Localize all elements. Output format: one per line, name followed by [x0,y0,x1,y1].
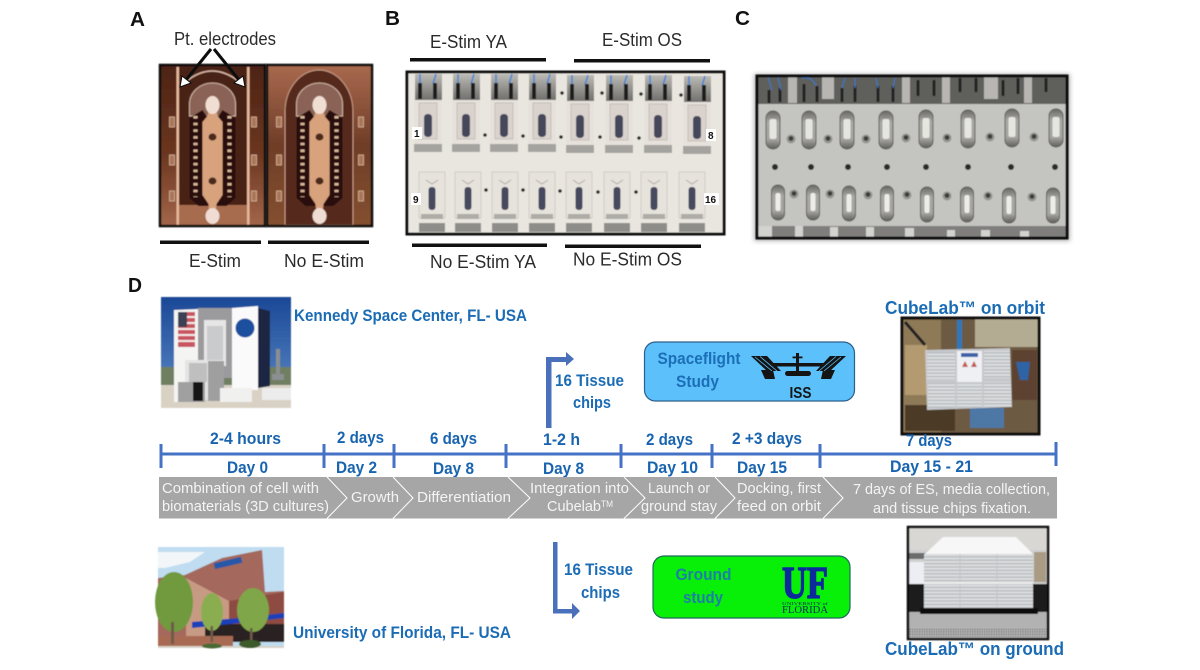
step: integration: Cubelab [547,498,601,515]
step: differentiation: Differentiation [417,489,511,506]
arrow: up to spaceflight study [546,352,574,428]
arrow: down to ground study [553,542,580,619]
step: integration [530,480,629,515]
timeline duration labels: 2-4 hours [210,430,281,448]
panel B: chip array photograph [385,8,724,272]
label: 16 tissue chips, ground [564,560,633,602]
logo: University of Florida [782,557,829,616]
step: seven days [853,481,1050,517]
step: growth: Growth [351,489,399,506]
timeline day labels: Day 2 [336,459,377,477]
timeline duration labels: 2 days [646,431,693,449]
timeline day labels: Day 15 - 21 [890,458,973,476]
box: spaceflight study [644,342,854,402]
photo: CubeLab on ground [908,527,1048,639]
label: University of Florida: University of Florida, FL- USA [293,623,511,642]
label: No E-Stim OS: No E-Stim OS [573,250,682,270]
label: E-Stim: E-Stim [189,251,241,271]
photo: Kennedy Space Center building [161,297,291,408]
step: launch [641,480,717,515]
label: 16 tissue chips, spaceflight: chips [573,393,611,412]
box: spaceflight study: Spaceflight [658,349,741,368]
photo: CubeLab on orbit [902,318,1039,434]
chip number 1: 1 [414,129,420,140]
timeline day labels: Day 8 [543,460,584,478]
logo: University of Florida: UNIVERSITY of [782,601,829,606]
label: E-Stim YA: E-Stim YA [430,32,507,52]
chip number 9 [411,193,421,206]
logo: University of Florida: FLORIDA [782,605,829,616]
chip number 9: 9 [413,195,419,206]
chip number 8 [706,129,716,142]
box: ground study [653,556,850,618]
label: CubeLab on orbit: CubeLab™ on orbit [885,298,1045,318]
step: seven days: and tissue chips fixation. [873,500,1031,517]
panel letter B: B [385,8,400,30]
icon: International Space Station [751,353,846,379]
photo: sixteen chips on tray [407,72,724,234]
step: launch: Launch or [648,480,710,497]
label: 16 tissue chips, ground: 16 Tissue [564,560,633,579]
timeline day labels: Day 0 [227,459,268,477]
label: Kennedy Space Center: Kennedy Space Center, FL- USA [294,306,527,325]
panel letter A: A [130,9,145,31]
label: 16 tissue chips, ground: chips [581,583,620,602]
photo: chip with E-Stim electrodes [160,65,265,226]
step: integration: Integration into [530,480,629,497]
step: combination of cells: Combination of cell with [162,480,319,497]
chip number 1 [412,127,422,140]
chip number 16 [704,193,719,206]
label: 16 tissue chips, spaceflight [555,371,624,412]
logo: University of Florida: UF [782,557,828,608]
timeline day labels [227,458,973,478]
panel letter C: C [735,8,750,30]
step: launch: ground stay [641,498,717,515]
chip number 8: 8 [708,131,714,142]
panel D: mission timeline [128,275,1064,659]
timeline duration labels: 7 days [906,432,952,450]
arrow: right electrode pointer [214,49,245,87]
box: spaceflight study: ISS [790,385,812,402]
panel letter D: D [128,275,142,297]
box: ground study: Ground [676,565,732,584]
timeline duration labels: 2 days [337,429,384,447]
timeline duration labels: 6 days [430,430,477,448]
label: No E-Stim YA: No E-Stim YA [430,252,536,272]
label: E-Stim OS: E-Stim OS [602,30,682,50]
timeline duration labels [210,429,952,450]
step: docking [737,480,822,515]
timeline axis with ticks [160,442,1058,468]
timeline day labels: Day 10 [647,459,698,477]
label: 16 tissue chips, spaceflight: 16 Tissue [555,371,624,390]
timeline day labels: Day 8 [433,460,474,478]
label: Pt. electrodes: Pt. electrodes [174,29,276,49]
panel C: metal plate photograph [735,8,1070,241]
panel A: chip photographs [130,9,372,271]
arrow: left electrode pointer [180,49,211,87]
label: No E-Stim: No E-Stim [284,251,364,271]
chip number 16: 16 [705,195,717,206]
step: seven days: 7 days of ES, media collection, [853,481,1050,498]
box: ground study: study [683,588,723,607]
process chevron bar [159,477,1057,518]
label: CubeLab on ground: CubeLab™ on ground [885,639,1064,659]
step: integration: TM [601,499,613,509]
timeline day labels: Day 15 [737,459,787,477]
box: spaceflight study: Study [676,372,719,391]
step: docking: feed on orbit [737,498,822,515]
step: combination of cells: biomaterials (3D cultures) [162,498,329,515]
step: docking: Docking, first [737,480,822,497]
photo: plate with chips [757,76,1067,238]
timeline duration labels: 2 +3 days [732,430,802,448]
step: combination of cells [162,480,329,515]
photo: chip without E-Stim [267,65,372,226]
photo: University of Florida building [155,547,284,648]
timeline duration labels: 1-2 h [543,431,580,449]
